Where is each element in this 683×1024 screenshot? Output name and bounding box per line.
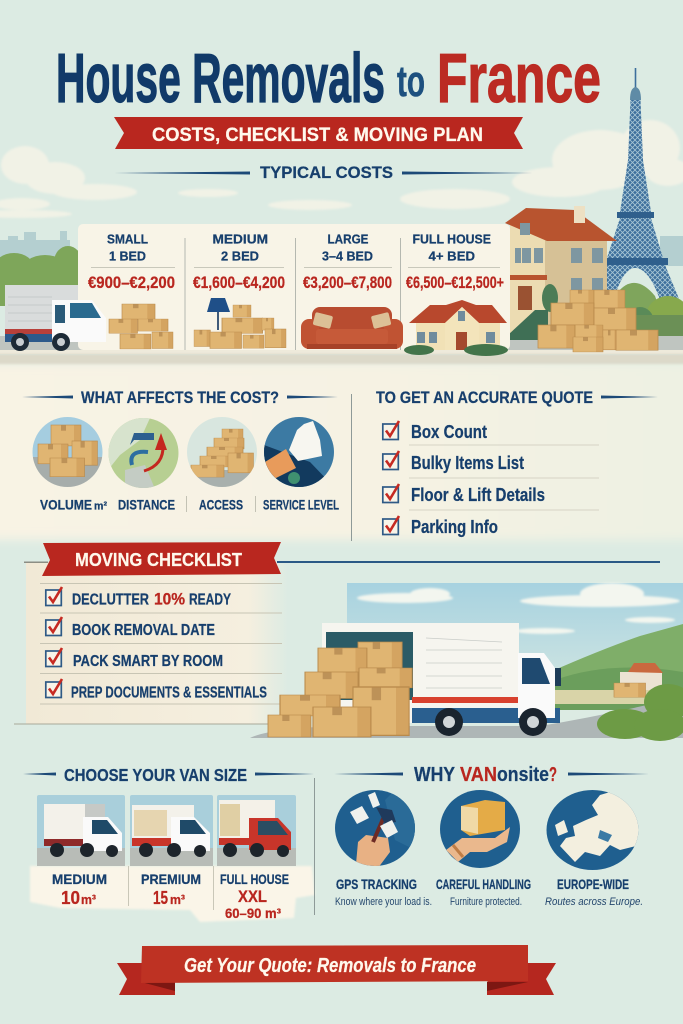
item: box count	[383, 421, 487, 442]
item: floor and lift	[383, 484, 545, 505]
label: medium: MEDIUM	[52, 871, 107, 887]
heading: why vanonsite: ?	[549, 764, 557, 786]
label: full house: FULL HOUSE	[220, 871, 289, 887]
label: europe wide: Routes across Europe.	[545, 896, 643, 908]
van labels	[52, 866, 289, 921]
card: large: 3–4 BED	[322, 248, 373, 264]
icon: access stairs	[187, 417, 258, 488]
labels: cost factors	[40, 496, 339, 512]
card: full house: €6,500–€12,500+	[406, 273, 504, 292]
label: full house: 60–90 m³	[225, 905, 281, 921]
item: pack smart	[46, 648, 223, 670]
label: medium: 10	[61, 888, 80, 908]
large house	[505, 206, 617, 340]
boxes: small	[109, 304, 173, 349]
icon: careful handling	[440, 790, 520, 868]
subtitle ribbon	[114, 117, 523, 149]
divider vertical	[351, 394, 352, 541]
bushes	[597, 684, 683, 741]
item: prep documents: PREP DOCUMENTS & ESSENTIALS	[71, 684, 267, 702]
labels: cost factors: VOLUME	[40, 496, 92, 512]
heading: why vanonsite	[334, 764, 649, 786]
ribbon: moving checklist	[42, 542, 281, 576]
labels: cost factors: m²	[94, 500, 107, 512]
heading: typical costs: TYPICAL COSTS	[260, 163, 393, 182]
list: accurate quote	[383, 421, 599, 537]
boxes and lamp: medium	[194, 298, 286, 348]
card: medium: MEDIUM	[212, 232, 268, 246]
card: medium: 2 BED	[221, 248, 259, 264]
clouds	[0, 120, 683, 218]
label: premium: m³	[170, 892, 186, 907]
labels: cost factors: SERVICE LEVEL	[263, 496, 339, 512]
card: small: 1 BED	[109, 248, 146, 264]
item: declutter: 10%	[154, 590, 185, 608]
label: gps tracking: GPS TRACKING	[336, 876, 417, 892]
eiffel tower	[590, 68, 682, 310]
label: medium	[52, 871, 107, 908]
heading: typical costs	[114, 163, 533, 182]
label: full house: XXL	[238, 887, 267, 906]
why labels	[335, 876, 643, 908]
icon: europe map	[546, 790, 640, 872]
label: careful handling: Furniture protected.	[450, 896, 522, 908]
heading: what affects the cost: WHAT AFFECTS THE COST?	[81, 388, 279, 407]
item: box count: Box Count	[411, 422, 487, 442]
card: small: €900–€2,200	[88, 273, 175, 292]
card: large: €3,200–€7,800	[303, 273, 392, 292]
item: declutter: DECLUTTER	[72, 592, 149, 608]
item: floor and lift: Floor & Lift Details	[411, 485, 545, 505]
title: to	[397, 57, 425, 106]
small house	[404, 300, 508, 356]
card: medium	[193, 232, 285, 292]
brush backing for van labels	[30, 866, 315, 922]
card: medium: €1,600–€4,200	[193, 273, 285, 292]
heading: choose your van size: CHOOSE YOUR VAN SIZE	[64, 765, 247, 785]
trees left	[0, 246, 82, 306]
card: premium van	[130, 795, 213, 866]
label: premium: 15	[153, 888, 168, 908]
road	[0, 336, 683, 364]
sky	[347, 583, 683, 705]
title: France	[437, 39, 601, 117]
labels: cost factors: ACCESS	[199, 496, 243, 512]
heading: why vanonsite: WHY	[414, 764, 456, 786]
labels: cost factors: DISTANCE	[118, 496, 175, 512]
column dividers	[184, 238, 401, 350]
card: full house: FULL HOUSE	[412, 232, 491, 246]
item: declutter	[46, 587, 231, 608]
bottom ribbon	[117, 945, 556, 995]
label: europe wide	[545, 876, 643, 908]
title: House Removals	[56, 39, 385, 117]
divider vertical lower	[314, 778, 315, 915]
skyline	[0, 231, 683, 266]
scene: truck and landscape	[250, 583, 683, 741]
sofa	[301, 307, 403, 349]
item: declutter: READY	[189, 592, 231, 608]
label: gps tracking	[335, 876, 432, 908]
hills	[550, 624, 683, 710]
item: bulky items	[383, 451, 524, 473]
bottom ribbon: Get Your Quote: Removals to France	[184, 955, 476, 977]
card: small: SMALL	[107, 232, 148, 246]
cottage	[614, 663, 663, 697]
subtitle ribbon: COSTS, CHECKLIST & MOVING PLAN	[152, 125, 483, 146]
card: large	[303, 232, 392, 292]
rules under bed sizes	[91, 267, 500, 268]
icon: volume boxes	[32, 417, 103, 487]
truck	[322, 623, 561, 736]
item: parking	[383, 516, 498, 537]
label: europe wide: EUROPE-WIDE	[557, 876, 629, 892]
panel: typical costs cards	[78, 224, 510, 350]
item: prep documents	[46, 679, 267, 702]
heading: accurate quote: TO GET AN ACCURATE QUOTE	[376, 388, 593, 407]
card: small	[88, 232, 175, 292]
item: book date	[46, 617, 215, 639]
icon: distance map	[108, 418, 179, 489]
road	[250, 702, 683, 738]
box stack	[268, 642, 412, 737]
item: book date: BOOK REMOVAL DATE	[72, 622, 215, 639]
label: careful handling	[436, 876, 531, 908]
item: parking: Parking Info	[411, 517, 498, 537]
heading: why vanonsite: VAN	[460, 764, 497, 786]
trees right	[505, 296, 683, 340]
label: premium	[141, 871, 201, 908]
card: full house	[406, 232, 504, 292]
item: pack smart: PACK SMART BY ROOM	[73, 653, 223, 670]
card: full house van	[217, 795, 296, 866]
icon: gps tracking	[335, 790, 415, 868]
heading: why vanonsite: onsite	[497, 764, 549, 786]
card: medium van	[37, 795, 125, 866]
box pile right	[538, 290, 658, 352]
ribbon: moving checklist: MOVING CHECKLIST	[75, 550, 242, 570]
scene clouds	[357, 583, 680, 634]
label: medium: m³	[81, 892, 97, 907]
label: full house	[220, 871, 289, 921]
label: premium: PREMIUM	[141, 871, 201, 887]
van left	[5, 285, 106, 351]
icon: service level glove	[264, 417, 335, 488]
card: large: LARGE	[328, 232, 369, 246]
item: bulky items: Bulky Items List	[411, 453, 524, 473]
label: gps tracking: Know where your load is.	[335, 896, 432, 908]
panel: moving checklist	[14, 542, 660, 724]
card: full house: 4+ BED	[428, 248, 475, 264]
label: careful handling: CAREFUL HANDLING	[436, 876, 531, 892]
